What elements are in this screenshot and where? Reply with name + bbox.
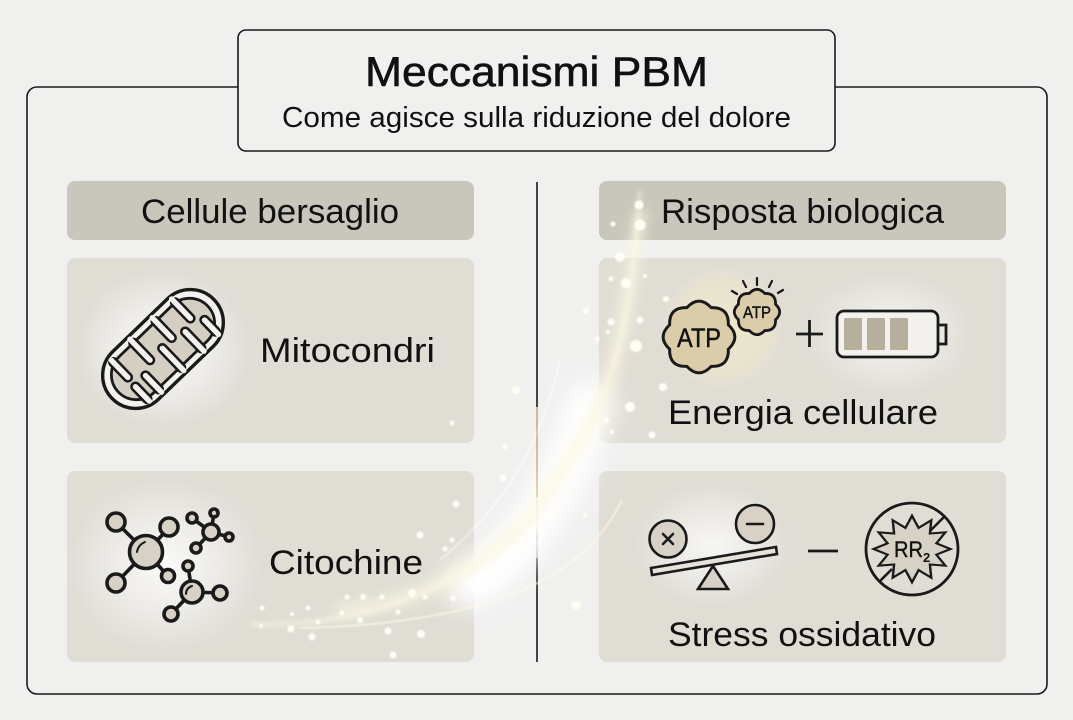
x circle bbox=[650, 520, 686, 558]
minus circle bbox=[736, 505, 774, 543]
title box bbox=[238, 30, 835, 151]
card background: citochine bbox=[67, 471, 474, 662]
icon: balance minus radical: RR bbox=[894, 537, 923, 562]
heading: cellule bersaglio: Cellule bersaglio bbox=[141, 193, 399, 231]
large ATP badge: ATP bbox=[677, 323, 721, 353]
gold glow bbox=[660, 266, 784, 390]
icon: mitochondrion bbox=[89, 276, 237, 422]
header background: risposta biologica bbox=[599, 181, 1006, 240]
header background: cellule bersaglio bbox=[67, 181, 474, 240]
small ATP badge bbox=[734, 289, 780, 335]
card background: stress ossidativo bbox=[599, 471, 1006, 662]
column divider bbox=[536, 182, 538, 662]
icon glows bbox=[67, 269, 975, 653]
seesaw bbox=[651, 547, 777, 575]
icon: cytokine molecules bbox=[107, 509, 233, 621]
card background: energia cellulare bbox=[599, 258, 1006, 443]
large ATP badge bbox=[663, 301, 735, 373]
heading: risposta biologica: Risposta biologica bbox=[661, 193, 944, 231]
title: Meccanismi PBM bbox=[365, 48, 708, 95]
label: stress ossidativo: Stress ossidativo bbox=[668, 616, 936, 654]
rays bbox=[732, 278, 783, 294]
icon: balance minus radical bbox=[650, 503, 958, 595]
battery bbox=[837, 311, 946, 357]
no radical symbol bbox=[866, 503, 958, 595]
icon: ATP plus battery bbox=[660, 266, 946, 390]
small ATP badge: ATP bbox=[743, 303, 771, 322]
panel: right column cards bbox=[599, 181, 1006, 662]
plus bbox=[796, 320, 823, 347]
label: citochine: Citochine bbox=[269, 544, 423, 582]
label: mitocondri: Mitocondri bbox=[260, 332, 435, 370]
light swoosh with sparkles bbox=[250, 190, 669, 658]
subtitle: Come agisce sulla riduzione del dolore bbox=[282, 102, 791, 134]
card background: mitocondri bbox=[67, 258, 474, 443]
dash bbox=[808, 550, 838, 552]
panel: left column cards bbox=[67, 181, 474, 662]
label: energia cellulare: Energia cellulare bbox=[668, 394, 938, 432]
icon: balance minus radical: 2 bbox=[923, 550, 930, 565]
